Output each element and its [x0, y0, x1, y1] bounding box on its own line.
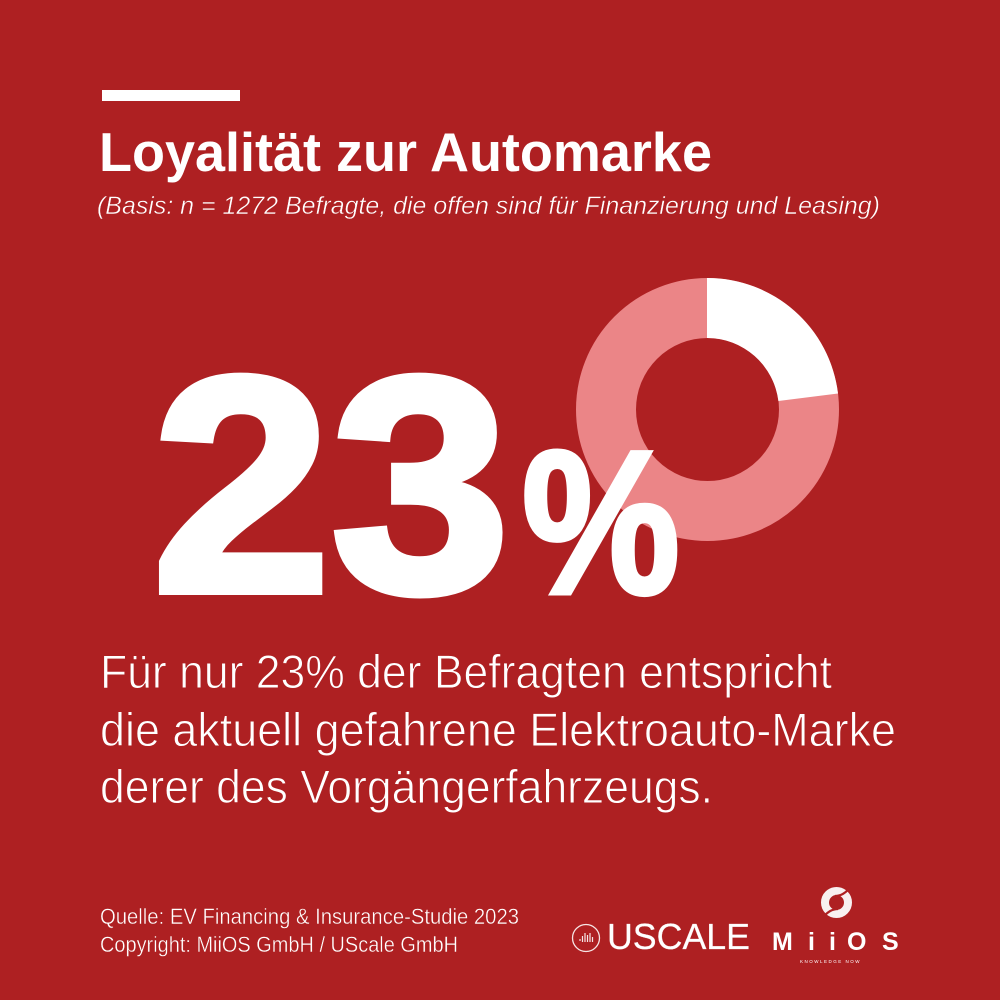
description: Für nur 23% der Befragten entspricht: [100, 645, 832, 698]
logo: MiiOS: [772, 889, 899, 964]
subtitle: (Basis: n = 1272 Befragte, die offen sind für Finanzierung und Leasing): [97, 192, 880, 220]
source and copyright: [100, 904, 519, 957]
big number 23%: %: [522, 408, 680, 637]
logo: USCALE: USCALE: [607, 916, 750, 957]
donut chart: [606, 278, 838, 511]
big number 23%: 23: [152, 314, 510, 657]
description: derer des Vorgängerfahrzeugs.: [100, 760, 713, 813]
logo: MiiOS: KNOWLEDGE NOW: [800, 959, 861, 964]
logo: MiiOS: MiiOS: [772, 928, 899, 956]
description: die aktuell gefahrene Elektroauto-Marke: [100, 703, 896, 756]
accent bar: [102, 90, 240, 101]
big number 23%: [152, 314, 680, 657]
source and copyright: Copyright: MiiOS GmbH / UScale GmbH: [100, 932, 458, 957]
description: [100, 645, 896, 813]
title: Loyalität zur Automarke: [99, 121, 712, 183]
source and copyright: Quelle: EV Financing & Insurance-Studie 2023: [100, 904, 519, 929]
